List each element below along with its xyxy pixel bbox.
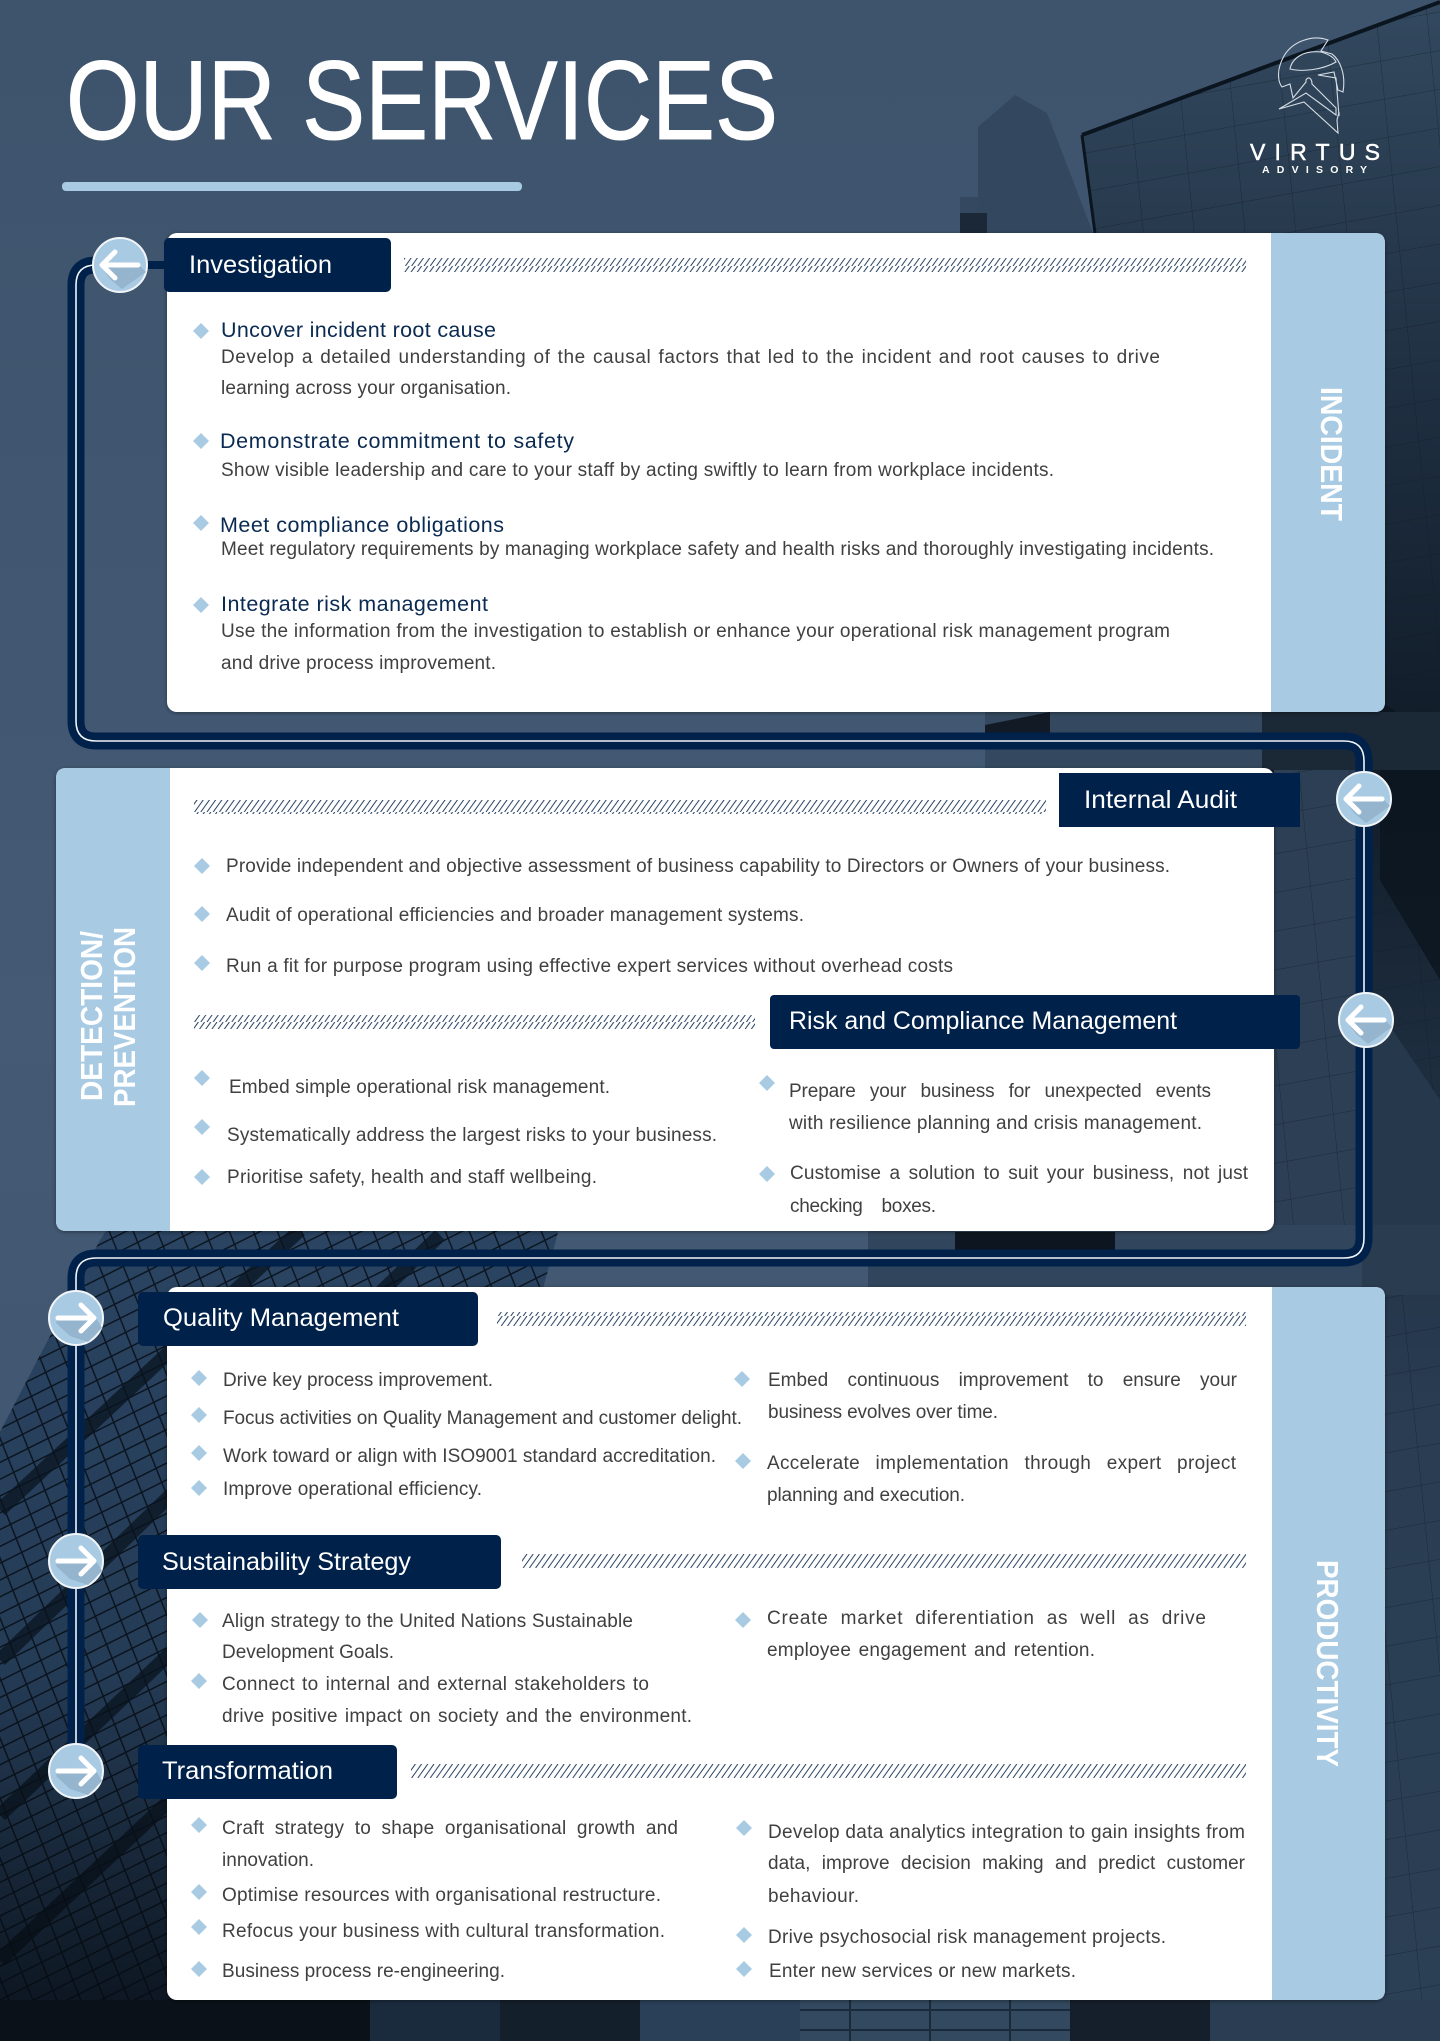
list: investigation: Integrate risk management — [221, 592, 488, 616]
logo subline: ADVISORY — [1262, 164, 1367, 176]
list: transformation left: innovation. — [222, 1850, 314, 1871]
side strip — [56, 768, 170, 1231]
list: quality left — [191, 1370, 742, 1500]
pipeline connector — [76, 265, 1364, 1771]
tab: transformation — [138, 1745, 397, 1799]
side label: incident: INCIDENT — [1314, 387, 1349, 521]
arrow: internal audit node — [1337, 772, 1391, 826]
side label: detection prevention: DETECTION/ — [74, 931, 109, 1101]
list: sustainability left: Align strategy to the United Nations Sustainable — [222, 1611, 633, 1632]
list: quality left: Improve operational efficiency. — [223, 1479, 482, 1500]
list: transformation right: Enter new services or new markets. — [769, 1961, 1076, 1982]
icon: spartan helmet — [1278, 38, 1344, 133]
list: investigation: Demonstrate commitment to safety — [220, 429, 574, 453]
tab: investigation — [147, 238, 391, 292]
hatch — [404, 258, 1246, 272]
list: internal audit: Run a fit for purpose program using effective expert services without overhead costs — [226, 956, 953, 977]
list: risk and compliance left — [194, 1070, 717, 1188]
hatch — [194, 800, 1046, 814]
side strip — [1272, 1287, 1385, 2000]
tab: risk and compliance — [770, 995, 1300, 1049]
list: investigation: learning across your organisation. — [221, 378, 511, 399]
list: risk and compliance right: Customise a solution to suit your business, not just — [790, 1163, 1249, 1184]
list: transformation right: data, improve decision making and predict customer — [768, 1853, 1246, 1874]
list: quality left: Work toward or align with ISO9001 standard accreditation. — [223, 1446, 716, 1467]
logo: Virtus Advisory — [1250, 38, 1380, 176]
tab: quality management — [138, 1292, 478, 1346]
logo wordmark: VIRTUS — [1250, 139, 1380, 165]
hatch — [194, 1015, 755, 1029]
tab: investigation: Investigation — [189, 251, 332, 279]
side strip — [1271, 233, 1385, 712]
list: risk and compliance left: Prioritise safety, health and staff wellbeing. — [227, 1167, 597, 1188]
list: investigation: Uncover incident root cause — [221, 318, 496, 342]
list: quality right: business evolves over time. — [768, 1402, 998, 1423]
list: sustainability right: Create market diferentiation as well as drive — [767, 1608, 1206, 1629]
hatch — [522, 1554, 1246, 1568]
list: transformation left: Refocus your business with cultural transformation. — [222, 1921, 665, 1942]
list: transformation left: Business process re-engineering. — [222, 1961, 505, 1982]
panel card — [56, 768, 1274, 1231]
tab: sustainability strategy: Sustainability Strategy — [162, 1548, 411, 1576]
arrow: risk and compliance node — [1339, 993, 1393, 1047]
tab: risk and compliance: Risk and Compliance Management — [789, 1007, 1177, 1035]
list: quality left: Focus activities on Quality Management and customer delight. — [223, 1408, 742, 1429]
list: internal audit — [194, 856, 1170, 977]
list: transformation right: Drive psychosocial risk management projects. — [768, 1927, 1166, 1948]
list: sustainability left: Development Goals. — [222, 1642, 394, 1663]
side label: detection prevention — [74, 927, 142, 1107]
arrow: investigation node — [93, 238, 147, 292]
arrow: quality node — [49, 1291, 103, 1345]
list: investigation: Develop a detailed understanding of the causal factors that led to the incident and root causes to drive — [221, 347, 1160, 368]
list: investigation: Meet compliance obligations — [220, 513, 504, 537]
list: risk and compliance left: Embed simple operational risk management. — [229, 1077, 610, 1098]
list: risk and compliance right: Prepare your business for unexpected events — [789, 1081, 1211, 1102]
list: internal audit: Audit of operational efficiencies and broader management systems. — [226, 905, 804, 926]
list: sustainability left: drive positive impact on society and the environment. — [222, 1706, 692, 1727]
list: sustainability right: employee engagement and retention. — [767, 1640, 1095, 1661]
list: investigation: Use the information from the investigation to establish or enhance your operational risk management program — [221, 621, 1170, 642]
list: sustainability left — [191, 1611, 692, 1727]
hatch — [497, 1312, 1246, 1326]
tab: transformation: Transformation — [162, 1757, 333, 1785]
panel: incident — [147, 233, 1385, 712]
list: transformation left: Optimise resources with organisational restructure. — [222, 1885, 661, 1906]
panel: productivity — [138, 1287, 1385, 2000]
side label: productivity: PRODUCTIVITY — [1310, 1560, 1345, 1767]
list: transformation left: Craft strategy to shape organisational growth and — [222, 1818, 678, 1839]
tab: quality management: Quality Management — [163, 1304, 399, 1332]
side label: detection prevention: PREVENTION — [107, 927, 142, 1107]
panel card — [167, 233, 1385, 712]
list: quality right: planning and execution. — [767, 1485, 965, 1506]
list: sustainability right — [735, 1608, 1206, 1661]
list: risk and compliance right — [759, 1075, 1249, 1217]
list: transformation right: Develop data analytics integration to gain insights from — [768, 1822, 1245, 1843]
list: transformation right: behaviour. — [768, 1886, 859, 1907]
hatch — [411, 1764, 1246, 1778]
list: investigation: Show visible leadership and care to your staff by acting swiftly to learn from workplace incidents. — [221, 460, 1054, 481]
list: quality right: Embed continuous improvement to ensure your — [768, 1370, 1238, 1391]
list: investigation: Meet regulatory requirements by managing workplace safety and health risks and thoroughly investigating incidents. — [221, 539, 1214, 560]
list: transformation right — [736, 1820, 1246, 1982]
arrow: transformation node — [49, 1744, 103, 1798]
panel: detection prevention — [56, 768, 1300, 1231]
tab: sustainability strategy — [138, 1535, 501, 1589]
title underline — [62, 182, 522, 191]
list: risk and compliance left: Systematically address the largest risks to your business. — [227, 1125, 717, 1146]
tab: internal audit — [1059, 773, 1300, 827]
list: investigation — [193, 318, 1214, 674]
list: investigation: and drive process improvement. — [221, 653, 496, 674]
panel card — [167, 1287, 1385, 2000]
tab: internal audit: Internal Audit — [1084, 786, 1237, 814]
list: transformation left — [191, 1817, 678, 1982]
list: risk and compliance right: checking boxes. — [790, 1196, 936, 1217]
list: sustainability left: Connect to internal and external stakeholders to — [222, 1674, 649, 1695]
list: quality left: Drive key process improvement. — [223, 1370, 493, 1391]
list: quality right — [734, 1370, 1238, 1506]
list: internal audit: Provide independent and objective assessment of business capability to Directors or Owners of your business. — [226, 856, 1170, 877]
title: OUR SERVICES — [66, 38, 778, 163]
list: quality right: Accelerate implementation through expert project — [767, 1453, 1237, 1474]
list: risk and compliance right: with resilience planning and crisis management. — [788, 1113, 1202, 1134]
arrow: sustainability node — [49, 1534, 103, 1588]
